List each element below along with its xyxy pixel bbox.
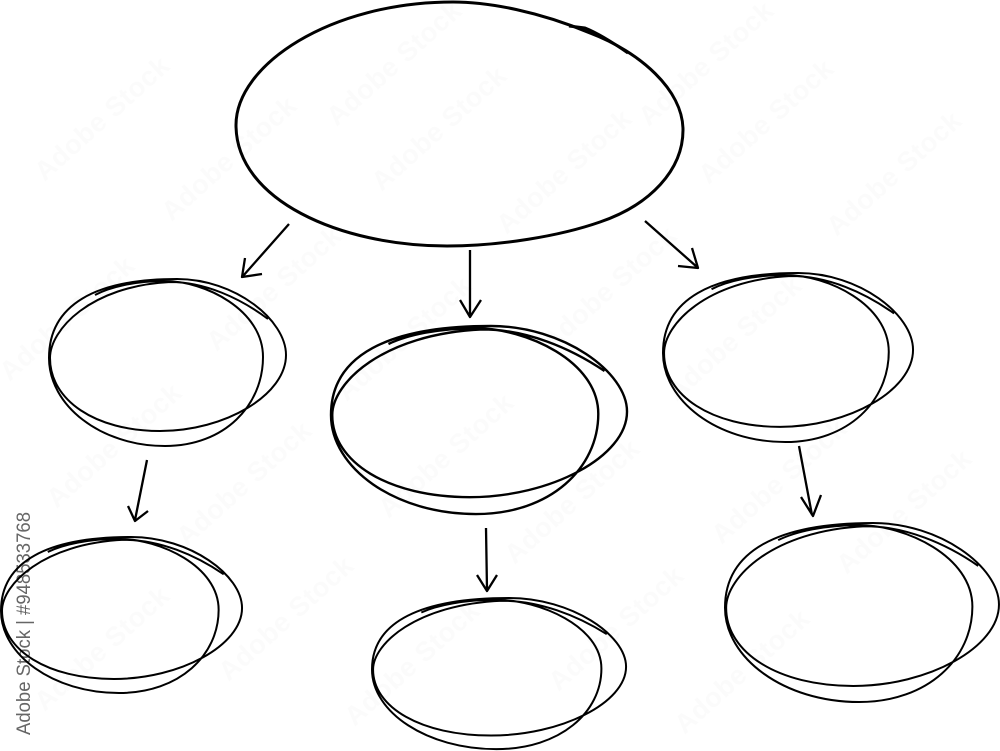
stock watermark pattern: Adobe Stock <box>373 387 520 524</box>
stock watermark pattern: Adobe Stock <box>536 220 683 357</box>
stock watermark pattern: Adobe Stock <box>339 595 486 732</box>
arrow: right bubble to lower right bubble <box>799 446 821 516</box>
stock watermark pattern: Adobe Stock <box>29 580 176 717</box>
arrow: top bubble to left bubble <box>242 224 289 277</box>
stock watermark pattern: Adobe Stock <box>661 270 808 407</box>
stock watermark pattern: Adobe Stock <box>693 53 840 190</box>
left scribbled bubble <box>49 279 286 446</box>
vertical stock id text: Adobe Stock | #948533768 <box>13 512 35 735</box>
stock watermark pattern: Adobe Stock <box>366 60 513 197</box>
stock watermark pattern: Adobe Stock <box>171 415 318 552</box>
stock watermark pattern: Adobe Stock <box>201 220 348 357</box>
lower centre scribbled bubble <box>372 598 626 749</box>
lower left scribbled bubble <box>1 537 242 693</box>
stock watermark pattern: Adobe Stock <box>706 413 853 550</box>
stock watermark pattern: Adobe Stock <box>213 550 360 687</box>
stock watermark pattern: Adobe Stock <box>669 603 816 740</box>
right scribbled bubble <box>663 273 913 442</box>
stock watermark pattern: Adobe Stock <box>821 105 968 242</box>
stock watermark pattern: Adobe Stock <box>156 90 303 227</box>
stock watermark pattern: Adobe Stock <box>543 560 690 697</box>
stock watermark pattern: Adobe Stock <box>41 377 188 514</box>
stock watermark pattern: Adobe Stock <box>331 270 478 407</box>
arrow: top bubble to centre bubble <box>460 250 481 317</box>
stock watermark pattern: Adobe Stock <box>831 443 978 580</box>
arrow: left bubble to lower left bubble <box>128 460 148 521</box>
stock watermark pattern: Adobe Stock <box>29 50 176 187</box>
stock watermark pattern: Adobe Stock <box>491 103 638 240</box>
stock watermark pattern: Adobe Stock <box>499 433 646 570</box>
arrow: top bubble to right bubble <box>645 221 698 268</box>
centre scribbled bubble <box>331 326 627 514</box>
arrow: centre bubble to lower centre bubble <box>477 528 497 591</box>
lower right scribbled bubble <box>725 523 999 702</box>
top main bubble <box>236 2 683 246</box>
